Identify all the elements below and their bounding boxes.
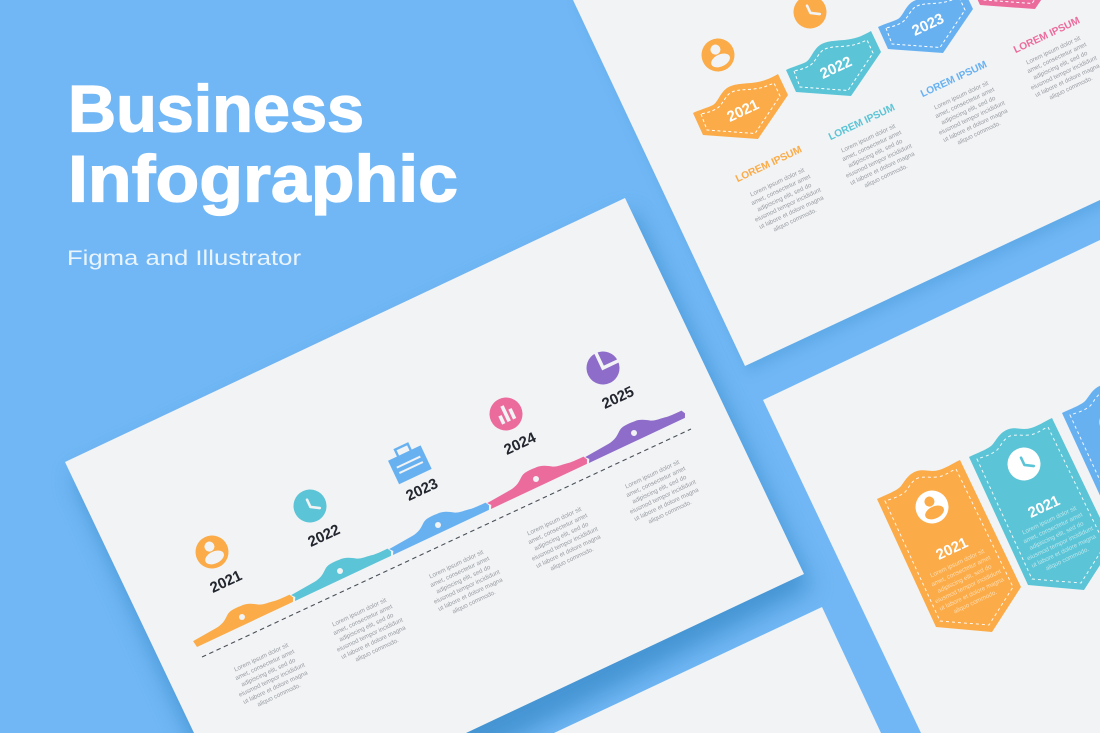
text block: 2022: adipiscing elit, sed do bbox=[338, 612, 395, 643]
panel: main timeline slide bbox=[65, 198, 804, 733]
ribbon: 2021 bbox=[188, 584, 295, 647]
text block: column 3: amet, consectetur amet bbox=[934, 86, 996, 120]
year: 2025: 2025 bbox=[599, 383, 637, 413]
card text: teal: adipiscing elit, sed do bbox=[1028, 520, 1085, 552]
heading: column 1: LOREM IPSUM bbox=[734, 144, 804, 185]
icon: clock bbox=[788, 0, 832, 34]
card text: orange: Lorem ipsum dolor sit bbox=[929, 548, 986, 579]
text block: 2022: ut labore et dolore magna bbox=[340, 624, 407, 661]
text block: column 3: Lorem ipsum dolor sit bbox=[933, 80, 990, 111]
text block: column 3: adipiscing elit, sed do bbox=[940, 95, 997, 126]
text block: 2023: eiusmod tempor incididunt bbox=[433, 569, 501, 606]
icon: briefcase bbox=[385, 439, 432, 484]
card text: orange: adipiscing elit, sed do bbox=[936, 563, 993, 595]
text block: column 3: aliquo commodo. bbox=[956, 120, 1002, 146]
text block: 2021: eiusmod tempor incididunt bbox=[238, 662, 306, 699]
text block: 2022: Lorem ipsum dolor sit bbox=[331, 597, 388, 628]
card text: teal: eiusmod tempor incididunt bbox=[1026, 525, 1095, 562]
tag: 2021 bbox=[693, 74, 788, 139]
icon: clock bbox=[1002, 442, 1046, 486]
text block: column 2: aliquo commodo. bbox=[863, 163, 909, 189]
text block: 2024: adipiscing elit, sed do bbox=[533, 521, 590, 552]
ribbon dot: 2024 bbox=[533, 476, 539, 482]
card text: teal: Lorem ipsum dolor sit bbox=[1021, 505, 1078, 536]
tag year: 2022: 2022 bbox=[817, 53, 855, 83]
text block: column 2: amet, consectetur amet bbox=[841, 129, 903, 163]
heading: column 4: LOREM IPSUM bbox=[1012, 15, 1082, 56]
text block: 2023: Lorem ipsum dolor sit bbox=[428, 549, 485, 580]
text block: column 1: aliquo commodo. bbox=[772, 207, 818, 233]
heading: column 2: LOREM IPSUM bbox=[827, 102, 897, 143]
text block: 2025: amet, consectetur amet bbox=[625, 465, 687, 499]
text block: column 3: ut labore et dolore magna bbox=[942, 107, 1009, 144]
tag year: 2021: 2021 bbox=[724, 96, 762, 126]
text block: column 3: eiusmod tempor incididunt bbox=[938, 100, 1006, 137]
text block: column 2: adipiscing elit, sed do bbox=[847, 138, 904, 169]
ribbon: 2022 bbox=[286, 538, 393, 601]
card text: teal: aliquo commodo. bbox=[1045, 546, 1091, 572]
card year: orange: 2021 bbox=[933, 534, 971, 564]
text block: 2022: eiusmod tempor incididunt bbox=[336, 617, 404, 654]
ribbon dot: 2025 bbox=[631, 430, 637, 436]
text block: 2021: adipiscing elit, sed do bbox=[240, 657, 297, 688]
icon: bar chart bbox=[484, 392, 528, 436]
ribbon: 2023 bbox=[384, 492, 491, 555]
title: Business bbox=[68, 72, 364, 146]
tag year: 2023: 2023 bbox=[909, 10, 947, 40]
card text: teal: ut labore et dolore magna bbox=[1030, 533, 1098, 570]
tag: 2024 bbox=[970, 0, 1065, 9]
text block: column 2: eiusmod tempor incididunt bbox=[845, 143, 913, 180]
text block: 2024: amet, consectetur amet bbox=[527, 512, 589, 546]
title: Infographic bbox=[68, 142, 458, 216]
text block: 2025: aliquo commodo. bbox=[647, 499, 693, 525]
year: 2021: 2021 bbox=[207, 567, 245, 597]
icon: person bbox=[910, 485, 954, 529]
year: 2024: 2024 bbox=[501, 429, 539, 459]
card: blue bbox=[1062, 374, 1100, 546]
text block: column 4: ut labore et dolore magna bbox=[1034, 62, 1100, 99]
text block: 2021: ut labore et dolore magna bbox=[242, 669, 309, 706]
ribbon: 2024 bbox=[482, 446, 589, 509]
year: 2022: 2022 bbox=[305, 521, 343, 551]
text block: 2023: adipiscing elit, sed do bbox=[435, 564, 492, 595]
card text: orange: ut labore et dolore magna bbox=[938, 576, 1006, 613]
text block: column 1: Lorem ipsum dolor sit bbox=[749, 167, 806, 198]
icon: clock bbox=[288, 484, 332, 528]
text block: column 4: Lorem ipsum dolor sit bbox=[1025, 35, 1082, 66]
panel: top right slide bbox=[573, 0, 1100, 366]
text block: 2023: amet, consectetur amet bbox=[429, 555, 491, 589]
card text: teal: amet, consectetur amet bbox=[1022, 511, 1084, 545]
card text: orange: eiusmod tempor incididunt bbox=[934, 568, 1003, 605]
ribbon: 2025 bbox=[580, 400, 687, 463]
text block: 2024: Lorem ipsum dolor sit bbox=[526, 506, 583, 537]
card text: orange: aliquo commodo. bbox=[953, 589, 999, 615]
text block: 2025: ut labore et dolore magna bbox=[633, 486, 700, 523]
text block: 2023: ut labore et dolore magna bbox=[437, 576, 504, 613]
tag: 2023 bbox=[878, 0, 973, 53]
tag: 2022 bbox=[786, 31, 881, 96]
text block: column 1: ut labore et dolore magna bbox=[758, 194, 825, 231]
card: orange bbox=[877, 460, 1021, 632]
icon: pie chart bbox=[580, 344, 626, 390]
text block: 2021: aliquo commodo. bbox=[256, 682, 302, 708]
text block: column 1: amet, consectetur amet bbox=[750, 173, 812, 207]
text block: column 4: amet, consectetur amet bbox=[1026, 41, 1088, 75]
text block: column 1: adipiscing elit, sed do bbox=[756, 182, 813, 213]
text block: column 4: adipiscing elit, sed do bbox=[1032, 50, 1089, 81]
panel: lower right slide bbox=[763, 240, 1100, 733]
text block: 2024: aliquo commodo. bbox=[549, 546, 595, 572]
card year: teal: 2021 bbox=[1025, 492, 1063, 522]
text block: 2021: amet, consectetur amet bbox=[234, 648, 296, 682]
card: teal bbox=[969, 418, 1100, 590]
text block: 2024: eiusmod tempor incididunt bbox=[531, 526, 599, 563]
ribbon dot: 2022 bbox=[337, 568, 343, 574]
text block: column 4: eiusmod tempor incididunt bbox=[1030, 55, 1098, 92]
heading: column 3: LOREM IPSUM bbox=[919, 59, 989, 100]
icon: partial white circle bbox=[1100, 406, 1101, 438]
text block: column 2: ut labore et dolore magna bbox=[849, 150, 916, 187]
ribbon dot: 2021 bbox=[239, 614, 245, 620]
text block: column 1: eiusmod tempor incididunt bbox=[754, 187, 822, 224]
icon: person bbox=[190, 530, 234, 574]
text block: 2025: Lorem ipsum dolor sit bbox=[624, 459, 681, 490]
text block: 2025: adipiscing elit, sed do bbox=[631, 474, 688, 505]
text block: column 4: aliquo commodo. bbox=[1048, 75, 1094, 101]
text block: 2022: amet, consectetur amet bbox=[332, 603, 394, 637]
title bbox=[68, 72, 458, 216]
subtitle: Figma and Illustrator bbox=[67, 246, 301, 270]
text block: 2023: aliquo commodo. bbox=[451, 589, 497, 615]
text block: column 2: Lorem ipsum dolor sit bbox=[840, 123, 897, 154]
ribbon dot: 2023 bbox=[435, 522, 441, 528]
card text: orange: amet, consectetur amet bbox=[930, 554, 992, 588]
text block: 2021: Lorem ipsum dolor sit bbox=[233, 642, 290, 673]
panel: bottom slide bbox=[554, 607, 881, 733]
icon: person bbox=[696, 33, 740, 77]
text block: 2024: ut labore et dolore magna bbox=[535, 533, 602, 570]
text block: 2025: eiusmod tempor incididunt bbox=[629, 479, 697, 516]
dashed baseline bbox=[202, 429, 691, 657]
year: 2023: 2023 bbox=[403, 475, 441, 505]
text block: 2022: aliquo commodo. bbox=[354, 637, 400, 663]
